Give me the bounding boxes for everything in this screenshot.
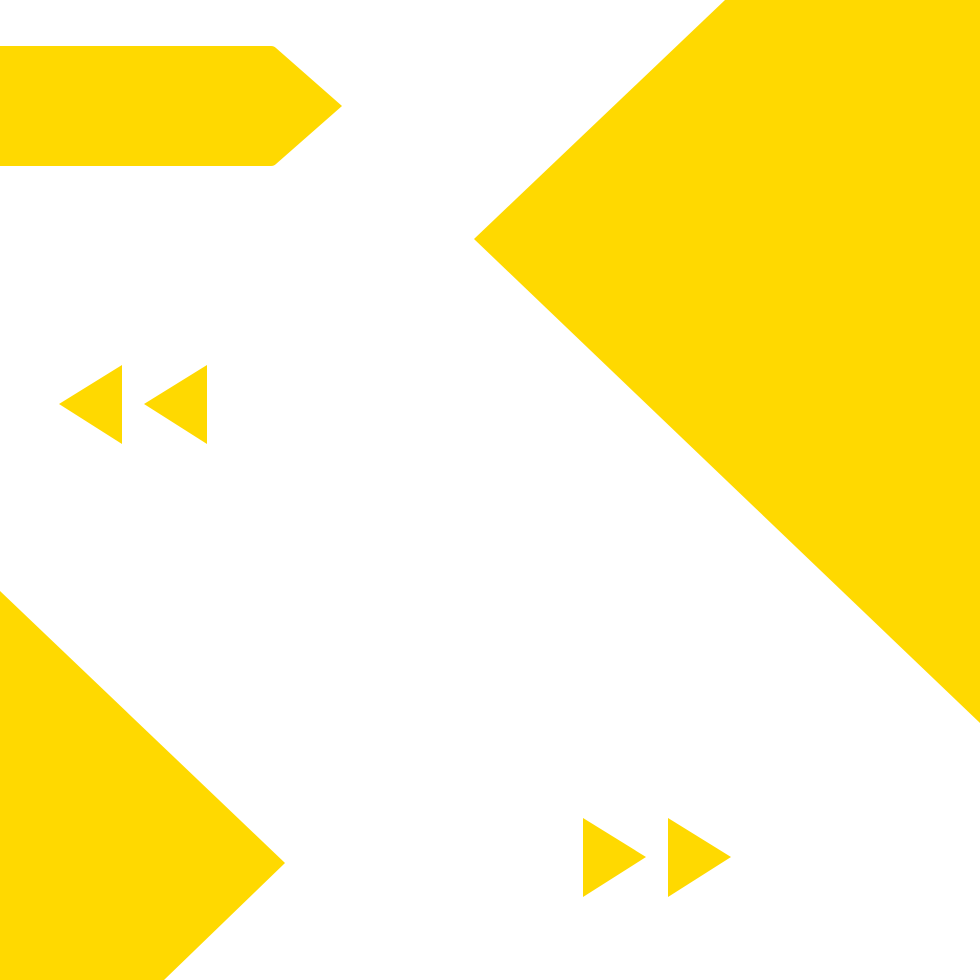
large diamond top right (474, 0, 980, 723)
arrow banner top left (0, 46, 342, 166)
icon: double left arrows (59, 365, 207, 444)
diamond bottom left (0, 591, 285, 980)
icon: double right arrows (583, 818, 731, 897)
